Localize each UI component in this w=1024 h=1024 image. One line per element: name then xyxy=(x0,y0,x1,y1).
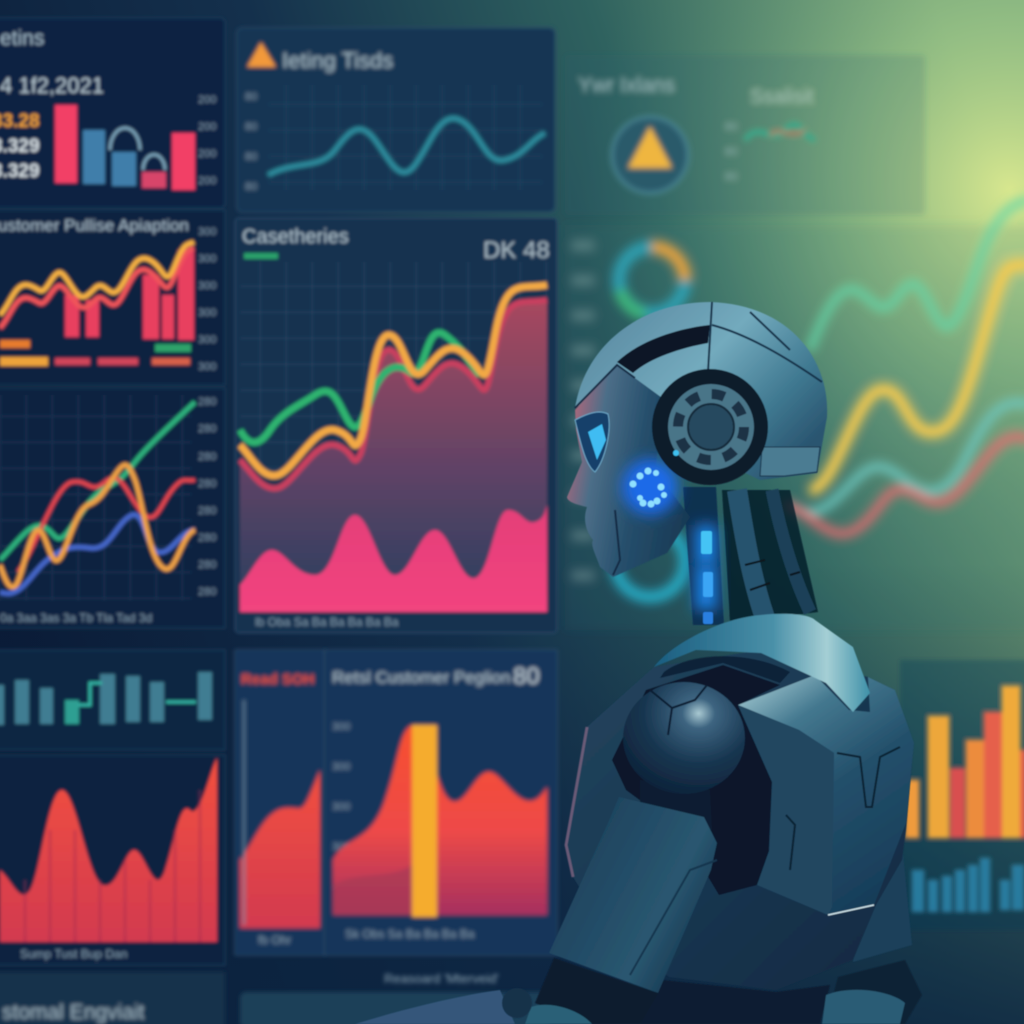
yellow wave xyxy=(810,265,1024,490)
heading: Retsl Customer Peglion xyxy=(332,668,511,687)
purple area xyxy=(240,300,547,612)
helmet seams xyxy=(708,302,822,382)
axis ticks: 280 xyxy=(198,451,216,463)
key figures xyxy=(0,111,40,182)
yellow highlight bar xyxy=(412,725,437,917)
y ticks: 80 xyxy=(245,121,257,133)
eye xyxy=(575,412,609,472)
green underline xyxy=(244,253,278,259)
panel: top middle trend xyxy=(237,28,555,212)
heading: Ieting Tisds xyxy=(282,48,393,73)
y ticks: 300 xyxy=(332,801,350,813)
mini bars xyxy=(0,672,212,725)
panel: bottom right bar chart xyxy=(900,660,1024,930)
orange line xyxy=(240,285,547,476)
green wave xyxy=(810,200,1024,350)
red line xyxy=(240,300,547,488)
axis ticks: 280 xyxy=(198,505,216,517)
teal wave xyxy=(790,403,1024,512)
x labels: 0a 3aa 3as 3a Tb Tla Tad 3d xyxy=(0,611,152,625)
y ticks: 000 xyxy=(572,488,594,503)
y ticks: 000 xyxy=(572,273,594,288)
panel: bottom middle orange chart xyxy=(325,650,557,955)
heading: Casetheries xyxy=(242,226,349,248)
ear disc xyxy=(652,369,768,485)
axis ticks: 280 xyxy=(198,423,216,435)
panel: top left metrics xyxy=(0,18,225,208)
heading: Ssalisit xyxy=(750,86,814,108)
gauge ring xyxy=(612,117,688,193)
grid xyxy=(268,85,543,190)
y ticks: 80 xyxy=(725,121,737,133)
waist xyxy=(640,980,830,1024)
axis ticks: 200 xyxy=(198,121,216,133)
red wave xyxy=(785,437,1024,534)
y ticks xyxy=(332,721,350,893)
helmet black slit xyxy=(617,325,710,373)
panel: customer line and bar chart xyxy=(0,210,225,385)
teal line xyxy=(268,118,545,175)
axis ticks: 280 xyxy=(198,478,216,490)
red line xyxy=(18,478,195,572)
axis ticks: 300 xyxy=(198,226,216,238)
face xyxy=(567,365,690,577)
chest highlight seam xyxy=(828,905,874,915)
axis ticks: 300 xyxy=(198,280,216,292)
heading: Ywr Ixlans xyxy=(578,74,675,97)
y ticks: 000 xyxy=(572,528,594,543)
lower donut xyxy=(615,527,685,597)
y ticks: 000 xyxy=(572,413,594,428)
axis xyxy=(243,700,245,925)
panel: bottom middle footer xyxy=(240,971,550,1024)
neck lights xyxy=(695,525,717,624)
axis ticks: 280 xyxy=(198,559,216,571)
axis ticks: 280 xyxy=(198,532,216,544)
axis ticks: 200 xyxy=(198,175,216,187)
heading: ustomer Pullise Apiaption xyxy=(0,216,189,235)
footer caption: Reasoard 'Mterveid' xyxy=(384,971,499,986)
y ticks: 300 xyxy=(332,721,350,733)
trend lines xyxy=(0,248,194,328)
robot cuff xyxy=(822,990,905,1024)
date label: 4 1f2,2021 xyxy=(0,73,104,98)
orange area xyxy=(333,725,547,915)
axis ticks xyxy=(198,94,216,187)
axis ticks: 280 xyxy=(198,586,216,598)
red area xyxy=(240,770,320,928)
y ticks: 000 xyxy=(572,568,594,583)
icon: warning triangle xyxy=(247,42,276,67)
value: 80 xyxy=(513,663,540,690)
elbow and forearm xyxy=(355,958,658,1024)
y ticks: 000 xyxy=(572,448,594,463)
axis ticks: 200 xyxy=(198,94,216,106)
robot back arm xyxy=(853,843,912,962)
bar chart: top left xyxy=(55,105,195,190)
jaw seam xyxy=(575,365,635,575)
pink area xyxy=(240,505,547,612)
helmet xyxy=(575,302,827,480)
dark cavity xyxy=(612,665,780,895)
upper arm xyxy=(549,797,717,993)
collar opening xyxy=(660,656,790,683)
arm seam xyxy=(630,860,717,975)
y ticks: 80 xyxy=(725,146,737,158)
y ticks: 000 xyxy=(572,308,594,323)
axis labels: Sump Tust Bup Dan xyxy=(20,947,127,961)
chest plate xyxy=(738,675,914,915)
axis ticks: 300 xyxy=(198,253,216,265)
robot neck xyxy=(683,487,818,625)
panel: bottom left small bars xyxy=(0,650,225,750)
heading: top left panel: etins xyxy=(0,27,44,50)
blue line xyxy=(0,515,195,594)
y ticks xyxy=(245,91,257,193)
y ticks: 300 xyxy=(332,761,350,773)
labels: fb Ohr xyxy=(258,933,291,947)
y ticks: 000 xyxy=(572,343,594,358)
chest seam lines xyxy=(786,747,900,870)
legend bars xyxy=(0,340,191,366)
y ticks: 80 xyxy=(245,151,257,163)
y ticks: 300 xyxy=(332,881,350,893)
y ticks: 000 xyxy=(572,378,594,393)
torso left rim xyxy=(566,727,587,877)
panel: bottom left red area chart xyxy=(0,755,225,965)
donut chart xyxy=(619,247,685,314)
panel: right wave chart xyxy=(565,200,1024,630)
value label: DK 48 xyxy=(483,237,550,264)
axis ticks: 300 xyxy=(198,334,216,346)
axis ticks: 300 xyxy=(198,361,216,373)
axis ticks: 200 xyxy=(198,148,216,160)
y ticks: 000 xyxy=(572,238,594,253)
collar xyxy=(654,614,870,712)
pink bars xyxy=(65,250,194,340)
shoulder sphere xyxy=(623,682,745,830)
y ticks: 80 xyxy=(245,181,257,193)
y ticks xyxy=(725,121,737,183)
side body plate xyxy=(738,705,834,915)
orange line xyxy=(0,465,195,587)
panel: top right status xyxy=(565,55,925,215)
panel: bottom middle small chart xyxy=(235,650,325,955)
y ticks: 300 xyxy=(332,841,350,853)
helmet rear plate xyxy=(760,447,820,476)
robot right hand xyxy=(822,960,922,1024)
robot torso xyxy=(566,650,914,990)
axis ticks xyxy=(198,396,216,598)
axis labels: Sk Obs Sa Ba Ba Ba Ba xyxy=(345,927,475,941)
panel: multi line chart xyxy=(0,388,225,628)
footer heading: stomal Engviait xyxy=(2,1001,145,1024)
axis ticks: 300 xyxy=(198,307,216,319)
panel: bottom left footer xyxy=(0,972,225,1024)
panel: main middle area chart xyxy=(235,218,557,633)
axis ticks xyxy=(198,226,216,373)
green line xyxy=(240,333,480,442)
heading: Read SOH xyxy=(241,671,314,688)
icon: warning triangle xyxy=(628,126,672,168)
axis labels: lb Oba Sa Ba Ba Ba Ba Ba xyxy=(255,615,399,629)
red area xyxy=(0,758,217,942)
green line xyxy=(0,402,195,560)
y ticks: 80 xyxy=(725,171,737,183)
axis ticks: 280 xyxy=(198,396,216,408)
blue bars xyxy=(912,858,1024,912)
y ticks: 80 xyxy=(245,91,257,103)
robot xyxy=(355,302,922,1024)
cheek lights xyxy=(622,459,678,515)
colored bars xyxy=(905,686,1024,838)
y ticks xyxy=(572,238,594,583)
robot head xyxy=(567,302,827,577)
small chart xyxy=(745,125,815,140)
